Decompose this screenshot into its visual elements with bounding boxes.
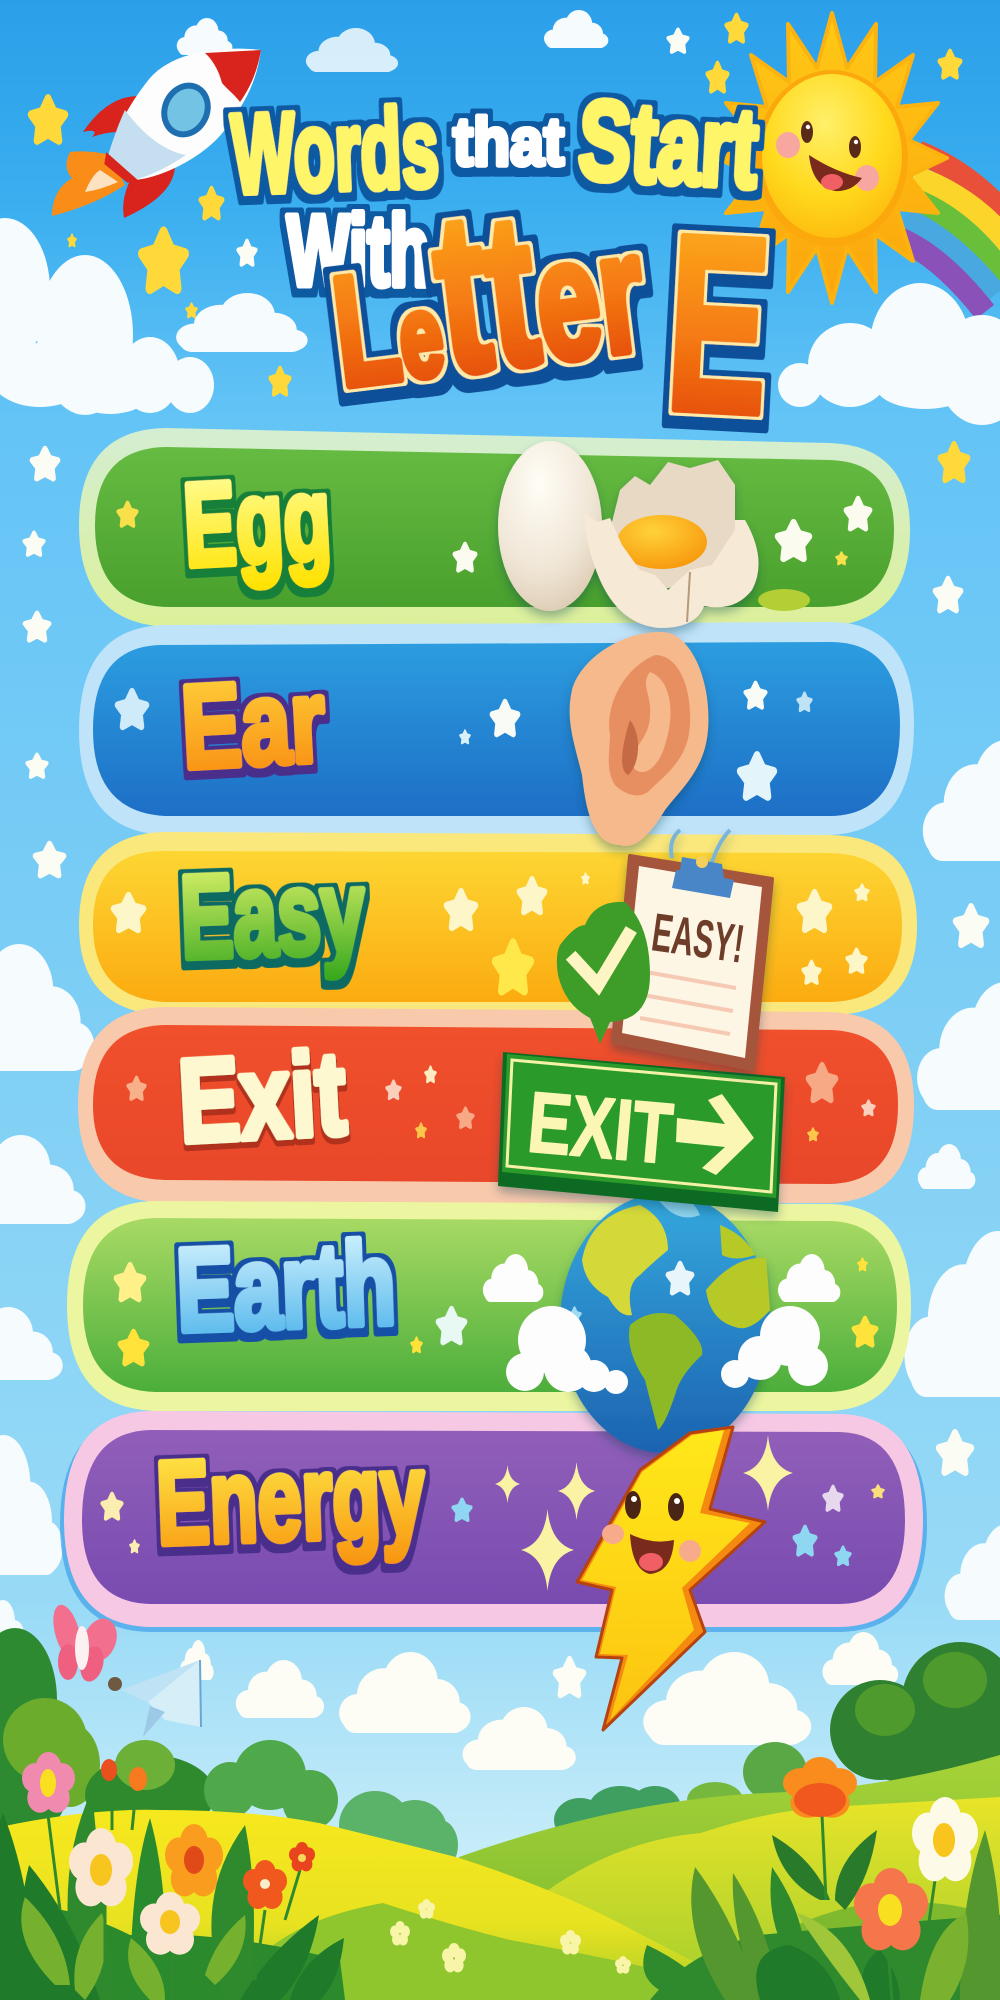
word: Easy: Easy [178, 846, 367, 984]
icon: egg [498, 441, 759, 628]
continents [582, 1194, 770, 1430]
stars: sky decoration [24, 15, 986, 1472]
landscape: rolling hills [0, 1755, 1000, 2000]
icon: exit sign [498, 1052, 785, 1212]
clouds: lower sky [180, 1632, 898, 1770]
icon: green check bubble [557, 902, 650, 1044]
leaves: left foreground [0, 1780, 345, 2000]
icon: lightning bolt with face [577, 1427, 765, 1730]
flowers: right cluster [783, 1757, 978, 1950]
clouds around globe [506, 1306, 828, 1394]
panel: Energy [60, 1411, 927, 1632]
icon: clipboard [613, 830, 772, 1069]
stars in Energy panel [102, 1486, 884, 1564]
rainbow [898, 152, 1000, 312]
panel: Egg [79, 428, 910, 627]
word: Egg: Egg [180, 452, 334, 592]
title line 1: Words that Start [229, 77, 761, 217]
stars in Egg panel [118, 499, 870, 611]
clipboard clip [671, 830, 734, 898]
word: Ear: Ear [178, 655, 328, 794]
small wildflowers on the hill [390, 1899, 631, 1974]
stems [48, 1780, 300, 2000]
small clouds in Earth panel [483, 1254, 840, 1302]
panel: Ear [79, 622, 914, 835]
icon: butterfly [48, 1602, 123, 1684]
cracked shell front [584, 512, 759, 628]
word: Earth: Earth [174, 1217, 398, 1357]
sparkles in Energy panel [495, 1435, 793, 1591]
icon: globe [560, 1193, 770, 1453]
sign label: EXIT [524, 1074, 676, 1182]
title line 1: Words that Start: that [453, 104, 564, 180]
stars in Easy panel [114, 873, 868, 991]
stems [822, 1815, 935, 2000]
icon: sun [717, 13, 947, 303]
sign arrow [676, 1094, 754, 1175]
title line 1: Words that Start: Start [576, 77, 761, 211]
cracked shell back [610, 460, 745, 590]
panel: Earth [67, 1201, 911, 1411]
icon: paper airplane [108, 1660, 201, 1737]
title line 2: With: With [287, 195, 430, 307]
icon: rocket [52, 49, 261, 218]
title [229, 77, 776, 466]
stars in Exit panel [128, 1065, 875, 1140]
title line 1: Words that Start: Words [229, 85, 441, 217]
stars in Ear panel [118, 683, 811, 797]
title line 2: big E: E [661, 182, 776, 466]
flowers: left cluster [22, 1752, 315, 1955]
word: Energy: Energy [154, 1429, 427, 1570]
panel: Easy [79, 832, 917, 1015]
stars in Earth panel [116, 1258, 876, 1363]
landscape: trees and bushes [0, 1628, 1000, 1870]
clipboard label: EASY! [648, 902, 748, 975]
icon: ear [570, 632, 708, 846]
word: Exit: Exit [175, 1027, 349, 1168]
leaves: right foreground [643, 1815, 1000, 2000]
title line 2: Letter: Letter [317, 146, 656, 434]
panel: Exit [78, 1007, 914, 1203]
